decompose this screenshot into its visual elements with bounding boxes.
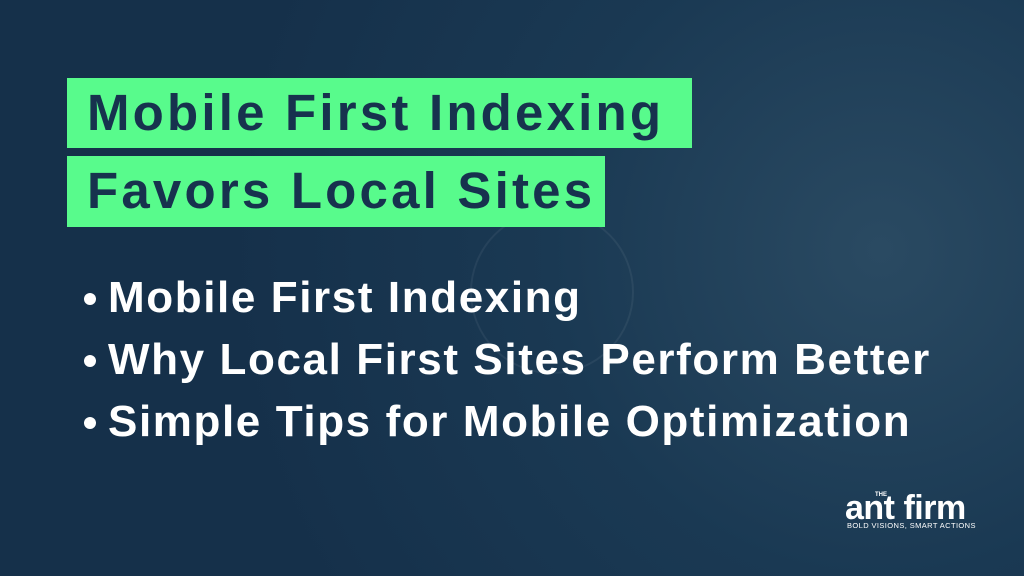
- logo: ant firm: [845, 489, 966, 527]
- logo: THE: [875, 492, 887, 498]
- bullet list: Mobile First Indexing: [108, 273, 582, 322]
- bullet list: Simple Tips for Mobile Optimization: [108, 397, 911, 446]
- bullet list: [84, 273, 931, 446]
- decorative circle: [470, 210, 634, 374]
- title line 1: Mobile First Indexing: [87, 84, 664, 141]
- logo: BOLD VISIONS, SMART ACTIONS: [847, 521, 976, 530]
- bullet list: Why Local First Sites Perform Better: [108, 335, 931, 384]
- title line 2: Favors Local Sites: [87, 162, 595, 219]
